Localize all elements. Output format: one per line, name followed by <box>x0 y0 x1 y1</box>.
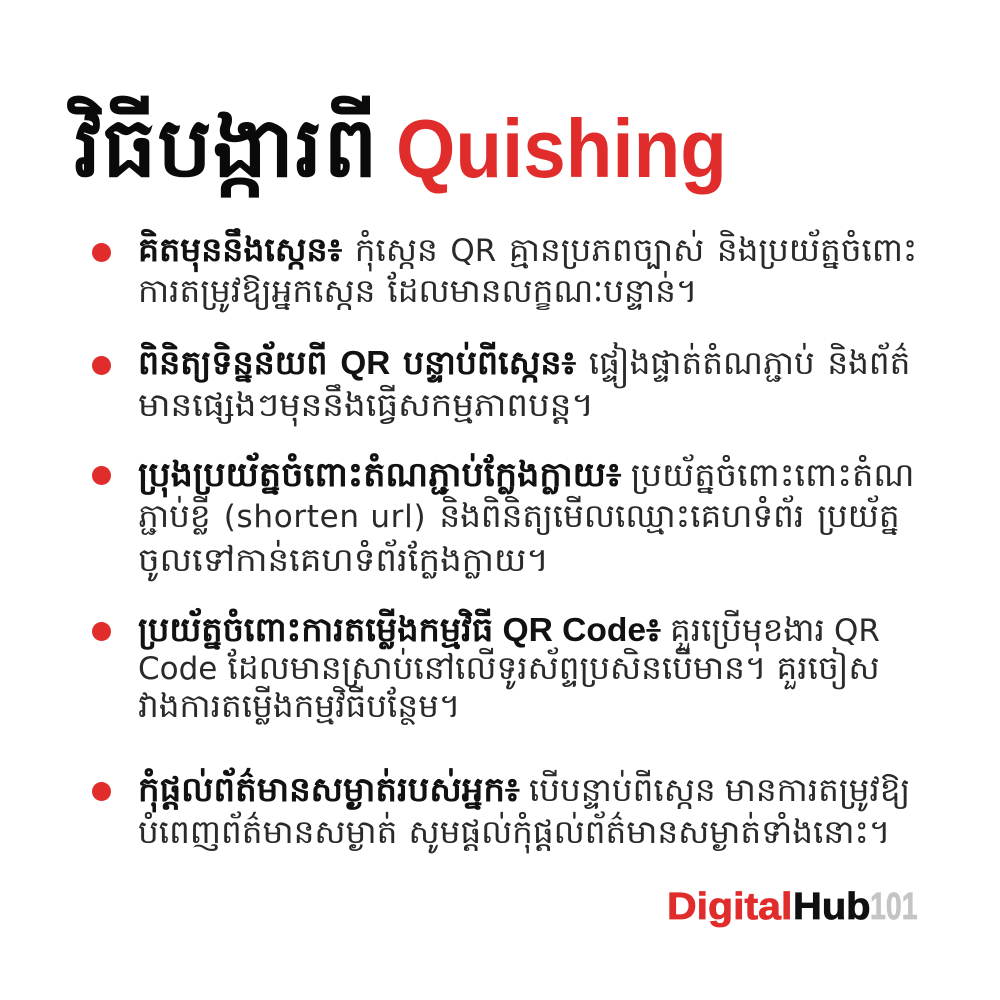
logo: DigitalHub101 <box>667 886 918 928</box>
title <box>67 96 727 198</box>
bullet 5: បំពេញព័ត៌មានសម្ងាត់ សូមផ្តល់កុំផ្តល់ព័ត៌មានសម្ងាត់ទាំងនោះ។ <box>138 813 890 850</box>
logo: DigitalHub101: Hub <box>793 886 871 928</box>
logo: DigitalHub101: 101 <box>870 886 918 928</box>
bullet 2 <box>92 341 910 426</box>
bullet 3: ចូលទៅកាន់គេហទំព័រក្លែងក្លាយ។ <box>138 541 549 578</box>
bullet 4 <box>92 608 880 725</box>
bullet 5 <box>92 767 910 854</box>
logo: DigitalHub101: Digital <box>667 886 792 928</box>
bullet 3 <box>92 452 915 582</box>
bullet 5: កុំផ្តល់ព័ត៌មានសម្ងាត់របស់អ្នក៖ បើបន្ទាប់ពីស្កេន មានការតម្រូវឱ្យ <box>138 771 910 809</box>
bullet 3: ភ្ជាប់ខ្លី (shorten url) និងពិនិត្យមើលឈ្មោះគេហទំព័រ ប្រយ័ត្ន <box>138 497 900 535</box>
bullet 1: គិតមុននឹងស្កេន៖ កុំស្កេន QR គ្មានប្រភពច្បាស់ និងប្រយ័ត្នចំពោះ <box>138 231 917 269</box>
bullet 4: Code ដែលមានស្រាប់នៅលើទូរស័ព្ទប្រសិនបើមាន។ គួរចៀស <box>138 649 880 687</box>
bullet 2: មានផ្សេងៗមុននឹងធ្វើសកម្មភាពបន្ត។ <box>138 386 594 423</box>
bullet 1: ការតម្រូវឱ្យអ្នកស្កេន ដែលមានលក្ខណៈបន្ទាន់។ <box>138 272 697 309</box>
title: Khmer words: វិធីបង្ការពី <box>74 101 379 194</box>
bullet 2: ពិនិត្យទិន្នន័យពី QR បន្ទាប់ពីស្កេន៖ ផ្ទៀងផ្ទាត់តំណភ្ជាប់ និងព័ត៌ <box>138 344 910 382</box>
bullet 1 <box>92 228 917 312</box>
bullet 4: ប្រយ័ត្នចំពោះការតម្លើងកម្មវិធី QR Code៖ គួរប្រើមុខងារ QR <box>138 611 880 649</box>
bullet 4: វាងការតម្លើងកម្មវិធីបន្ថែម។ <box>138 687 460 724</box>
bullet 3: ប្រុងប្រយ័ត្នចំពោះតំណភ្ជាប់ក្លែងក្លាយ៖ ប្រយ័ត្នចំពោះពោះតំណ <box>138 456 915 494</box>
title: Quishing: Quishing <box>396 102 727 195</box>
